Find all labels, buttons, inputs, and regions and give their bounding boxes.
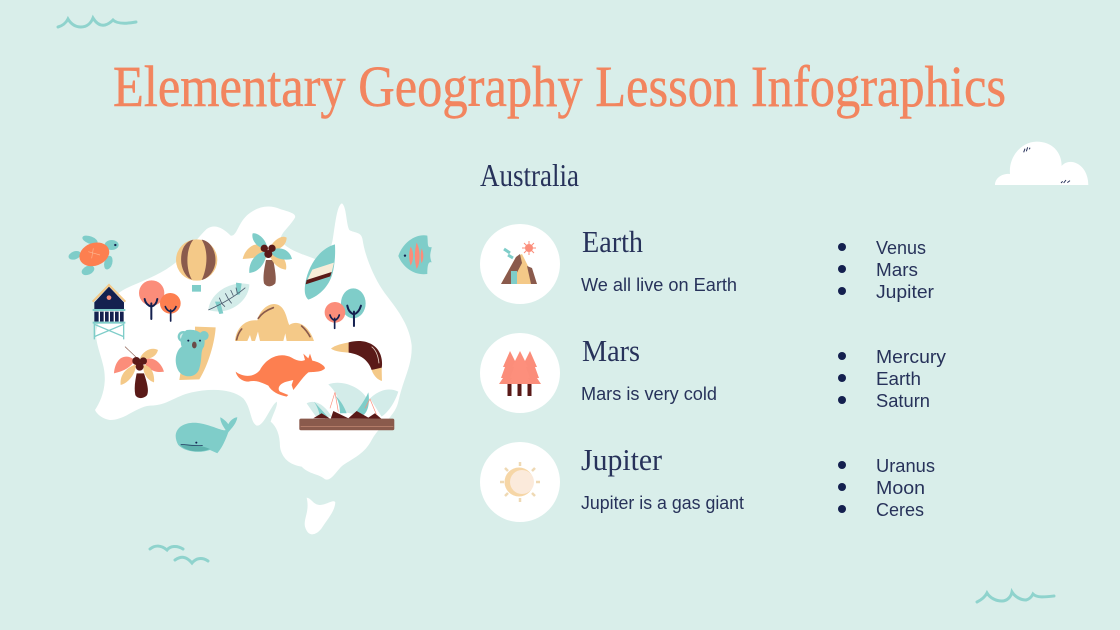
- row: Earth: [480, 224, 934, 304]
- wave: bottom right: [977, 592, 1054, 602]
- bullet list: Earth: Jupiter: [876, 282, 934, 302]
- icon: trees (teal and salmon): [325, 288, 366, 328]
- row: Jupiter: [480, 442, 935, 522]
- heading: Australia: Australia: [480, 157, 579, 193]
- title: Elementary Geography Lesson Infographics: [113, 54, 1006, 119]
- bullet list: Jupiter: Ceres: [876, 500, 924, 520]
- icon: Sydney Opera House: [299, 383, 398, 430]
- icon: stilt house: [93, 285, 125, 339]
- heading: Mars: Mars: [582, 333, 640, 368]
- bullet list: Jupiter: Moon: [876, 478, 925, 498]
- icon: koala on tree: [176, 327, 216, 380]
- icon: palm tree (west): [114, 347, 164, 398]
- icon: palm tree (north): [243, 233, 292, 286]
- row: Mars: [480, 333, 946, 413]
- bullet list: Jupiter: Uranus: [876, 456, 935, 476]
- icon: hot air balloon: [176, 239, 217, 292]
- icon: surfboard: [305, 244, 335, 300]
- icon: kangaroo: [236, 354, 325, 397]
- icon: whale: [176, 417, 237, 453]
- icon: leaf: [208, 283, 249, 314]
- heading: Earth: Earth: [582, 224, 643, 259]
- bullet list: Mars: Mercury: [876, 347, 946, 367]
- bullet list: Mars: Earth: [876, 369, 921, 389]
- map: Tasmania: [305, 498, 335, 534]
- icon: orange trees: [139, 280, 181, 321]
- icon: turtle: [67, 234, 119, 277]
- birds: bottom left: [150, 546, 208, 563]
- map of Australia with landmarks: [67, 203, 432, 534]
- icon: mountain in circle: [480, 224, 560, 304]
- icon: boomerang: [331, 341, 382, 381]
- wave: top left: [58, 18, 136, 27]
- map: mainland: [95, 203, 412, 480]
- bullet list: Mars: Saturn: [876, 391, 930, 411]
- bullet list: Earth: Mars: [876, 260, 918, 280]
- icon: fish: [398, 235, 432, 274]
- text: Earth description: We all live on Earth: [581, 275, 737, 295]
- text: Mars description: Mars is very cold: [581, 384, 717, 404]
- icon: pine trees in circle: [480, 333, 560, 413]
- icon: rock formation: [235, 304, 314, 341]
- text: Jupiter description: Jupiter is a gas giant: [581, 493, 744, 513]
- heading: Jupiter: Jupiter: [581, 442, 663, 477]
- bullet list: Earth: Venus: [876, 238, 926, 258]
- icon: cloud: [995, 142, 1088, 185]
- bullet list: Jupiter: [838, 456, 935, 520]
- icon: sun in circle: [480, 442, 560, 522]
- bullet list: Earth: [838, 238, 934, 302]
- bullet list: Mars: [838, 347, 946, 411]
